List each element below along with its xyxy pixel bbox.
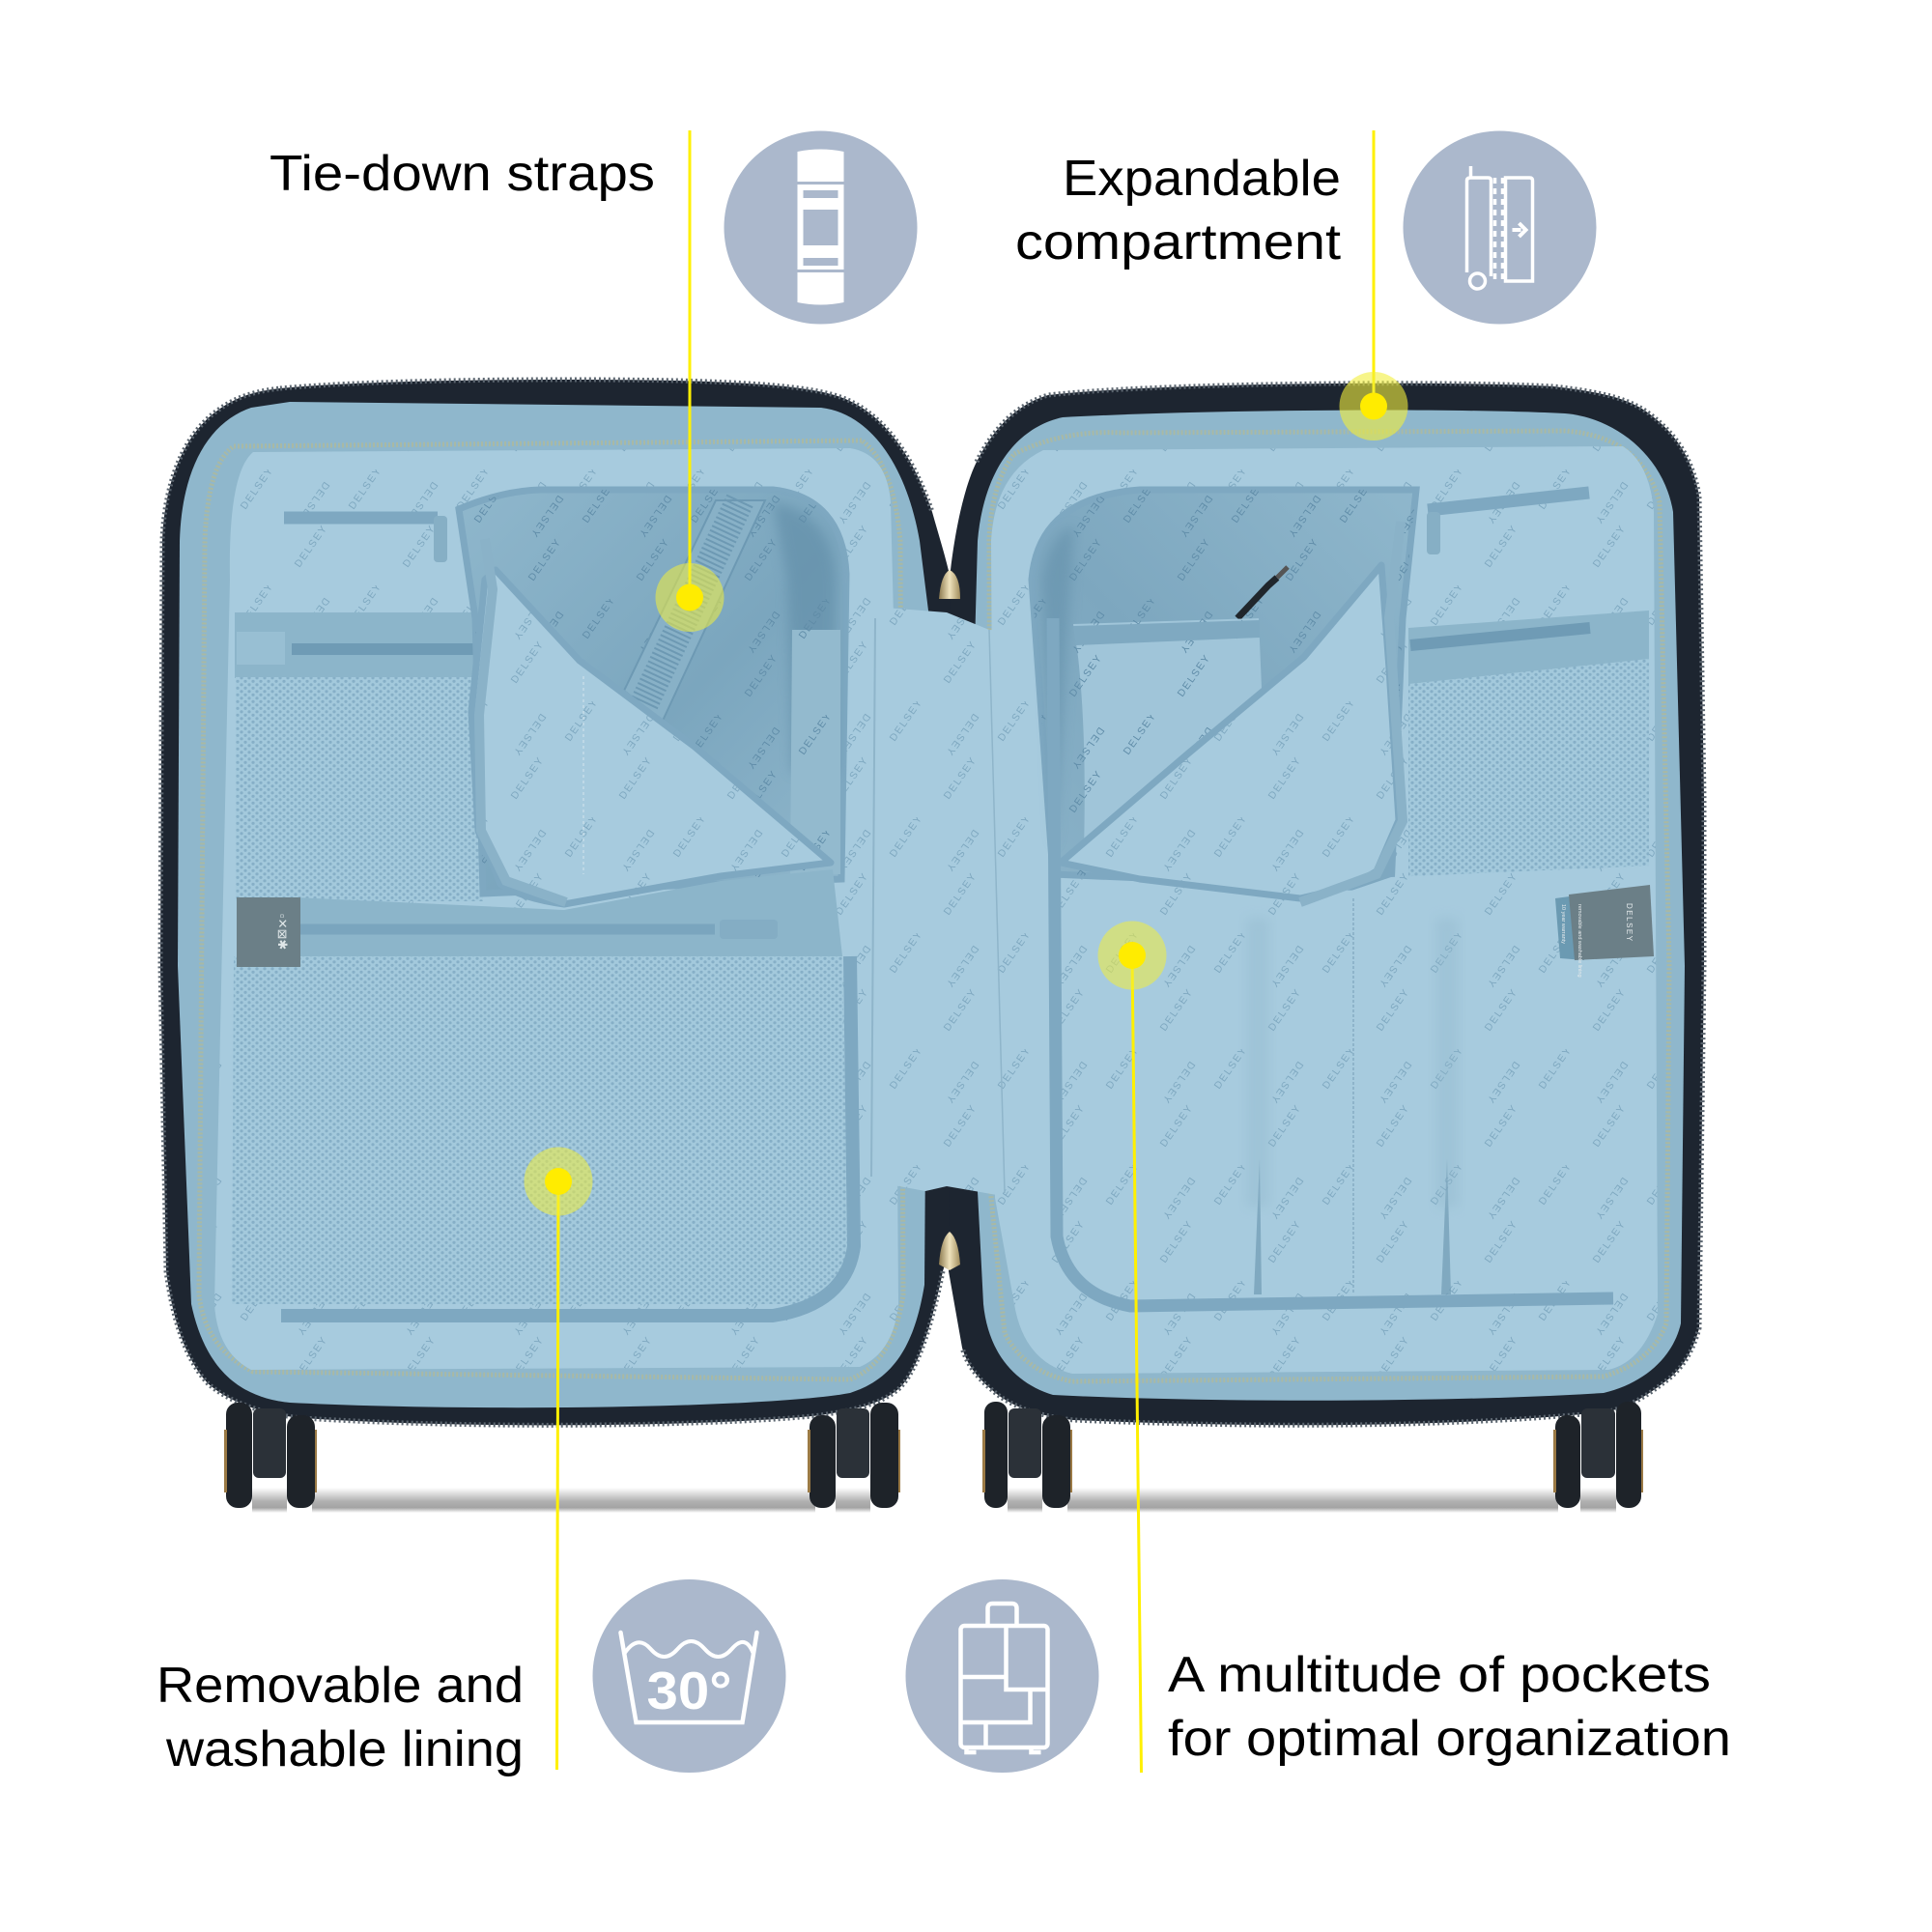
right shell with zipper <box>949 384 1704 1425</box>
left lining gusset <box>178 402 929 1407</box>
callout line: pockets <box>1097 922 1167 1773</box>
label: A multitude of pockets for optimal organization: A multitude of pockets <box>1168 1647 1711 1703</box>
right pocket tags: removable and washable lining <box>1577 904 1582 978</box>
left shell with zipper <box>160 380 951 1425</box>
label: Removable and washable lining: Removable and <box>156 1658 524 1714</box>
cable connector <box>1277 567 1288 578</box>
callout line: removable lining <box>524 1148 593 1770</box>
left lining zipper <box>199 440 903 1379</box>
left upper pocket zipper <box>284 512 438 524</box>
right lining zipper <box>989 431 1669 1381</box>
charging cable <box>1237 578 1277 618</box>
label: Expandable compartment: compartment <box>1015 214 1342 270</box>
left back panel <box>214 448 898 1370</box>
right lower zipper <box>1053 618 1613 1306</box>
left lower zipper <box>281 956 854 1316</box>
right open compartment <box>1032 490 1416 889</box>
left zipper tab <box>434 516 447 562</box>
wheels <box>224 1402 1643 1508</box>
left lower zip band <box>295 869 842 956</box>
left lower mesh pocket <box>232 956 848 1304</box>
label: Removable and washable lining <box>156 1658 524 1777</box>
right upper mesh <box>1408 659 1649 884</box>
right expandable pocket <box>1061 866 1658 1298</box>
left suitcase <box>160 380 951 1425</box>
label: A multitude of pockets for optimal organization <box>1168 1647 1731 1767</box>
icon: expandable suitcase <box>1403 131 1596 325</box>
callout line: tie-down straps <box>655 130 724 632</box>
right zipped flap <box>1061 522 1403 902</box>
right pocket tags: DELSEY <box>1625 903 1634 943</box>
right pocket tags: 10 year warranty <box>1560 904 1566 944</box>
label: Expandable compartment <box>1015 151 1342 270</box>
left open compartment <box>459 490 846 894</box>
hinge top <box>939 570 960 599</box>
label: Tie-down straps: Tie-down straps <box>270 146 655 202</box>
centre divider flap <box>867 607 1041 1195</box>
hinge bottom <box>939 1232 960 1270</box>
right lining gusset <box>966 411 1685 1401</box>
power bank pouch <box>1073 618 1264 850</box>
left garment tag <box>237 897 300 967</box>
right zip band <box>1408 611 1649 688</box>
label: Expandable compartment: Expandable <box>1063 151 1341 207</box>
label: Removable and washable lining: washable lining <box>165 1721 524 1777</box>
left zip band <box>235 612 478 678</box>
callout line: expandable compartment <box>1339 130 1408 440</box>
label: A multitude of pockets for optimal organization: for optimal organization <box>1168 1711 1731 1767</box>
right back panel <box>991 446 1658 1374</box>
icon: wash at 30 degrees: 30° <box>647 1661 732 1720</box>
icon: wash at 30 degrees <box>593 1579 786 1773</box>
tie-down strap <box>624 500 765 721</box>
right pocket tags <box>1555 885 1654 978</box>
left garment tag: ▫✕⊠✱ <box>275 914 290 950</box>
left zipped flap <box>471 539 831 904</box>
right zipper tab <box>1427 512 1440 554</box>
right suitcase <box>949 384 1704 1425</box>
icon: organized luggage <box>906 1579 1099 1773</box>
right upper pocket zipper <box>1428 493 1589 510</box>
icon: tie-down strap <box>724 131 918 325</box>
floor shadows <box>252 1488 1616 1513</box>
left upper mesh <box>236 677 483 901</box>
